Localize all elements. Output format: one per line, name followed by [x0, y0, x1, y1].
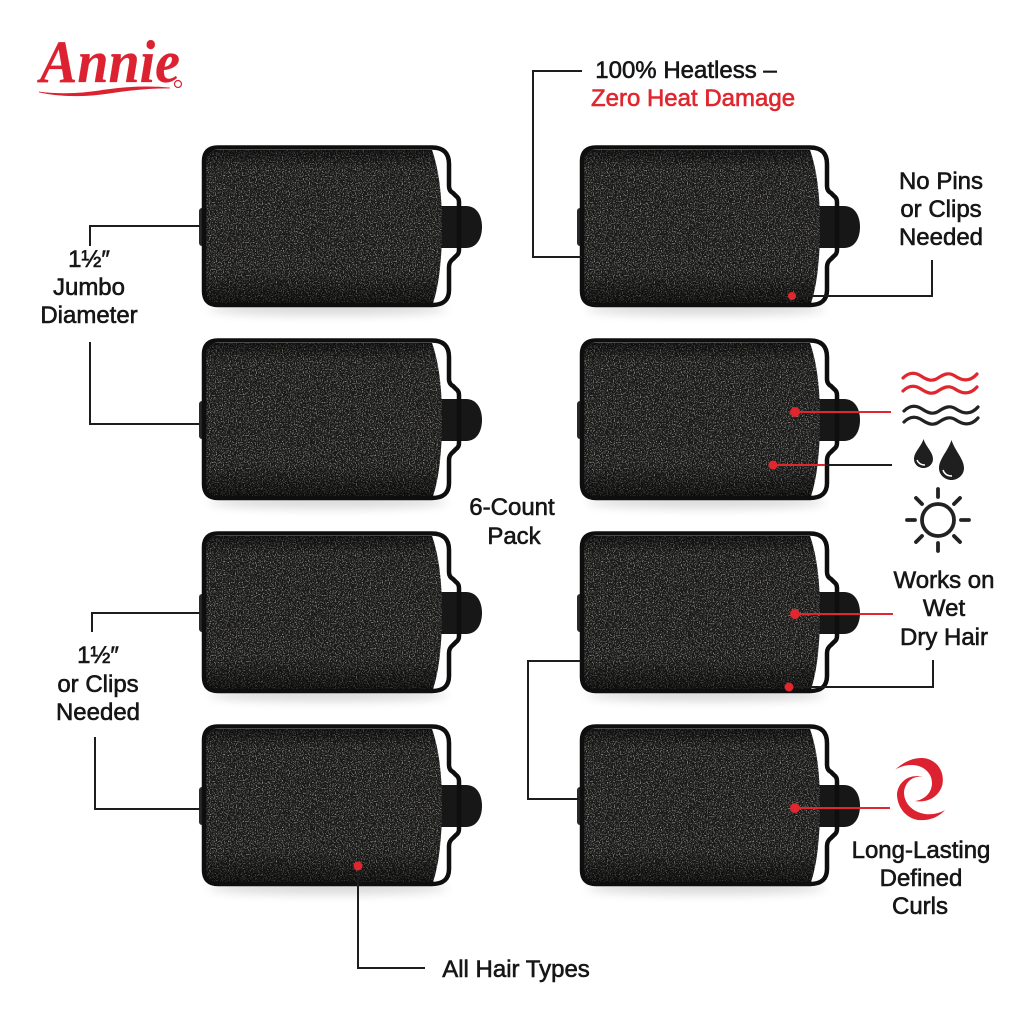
callout: jumbo diameter: 1½″ [68, 246, 110, 273]
callout: all hair types [354, 862, 590, 983]
callout: jumbo diameter: Diameter [40, 302, 138, 329]
label: 6-count pack: 6-Count [469, 494, 555, 521]
icon: sun [907, 489, 969, 551]
callout: or clips needed: or Clips [57, 671, 139, 698]
icon: red swirl [895, 758, 945, 820]
callout: long-lasting defined curls: Defined [880, 865, 962, 892]
callout: works on wet dry hair: Wet [923, 595, 965, 622]
callout: no pins or clips: Needed [899, 224, 983, 251]
callout: works on wet dry hair: Works on [894, 567, 994, 594]
rollers: left column [199, 148, 482, 894]
icon: water drops with leader [768, 439, 964, 480]
callout: works on wet dry hair: Dry Hair [900, 624, 988, 651]
callout: heatless: 100% Heatless – [595, 57, 777, 84]
callout: long-lasting defined curls [790, 758, 990, 920]
callout: or clips needed [56, 613, 200, 809]
rollers: right column [577, 148, 860, 894]
callout: jumbo diameter: Jumbo [53, 274, 125, 301]
callout: long-lasting defined curls: Long-Lasting [852, 837, 990, 864]
callout: no pins or clips [788, 168, 983, 300]
callout: heatless: Zero Heat Damage [591, 85, 795, 112]
callout: all hair types: All Hair Types [442, 956, 590, 983]
icon: wave lines with leader [790, 373, 978, 424]
connector: right rollers [528, 661, 581, 799]
label: 6-count pack: Pack [487, 523, 542, 550]
callout: works on wet dry hair [784, 567, 994, 692]
callout: jumbo diameter [40, 226, 200, 424]
label: 6-count pack [469, 494, 555, 550]
logo: Annie: Annie [36, 29, 180, 95]
callout: no pins or clips: No Pins [899, 168, 983, 195]
callout: no pins or clips: or Clips [900, 196, 982, 223]
callout: or clips needed: Needed [56, 699, 140, 726]
callout: long-lasting defined curls: Curls [892, 893, 948, 920]
callout: or clips needed: 1½″ [77, 642, 119, 669]
callout: heatless [533, 57, 795, 257]
